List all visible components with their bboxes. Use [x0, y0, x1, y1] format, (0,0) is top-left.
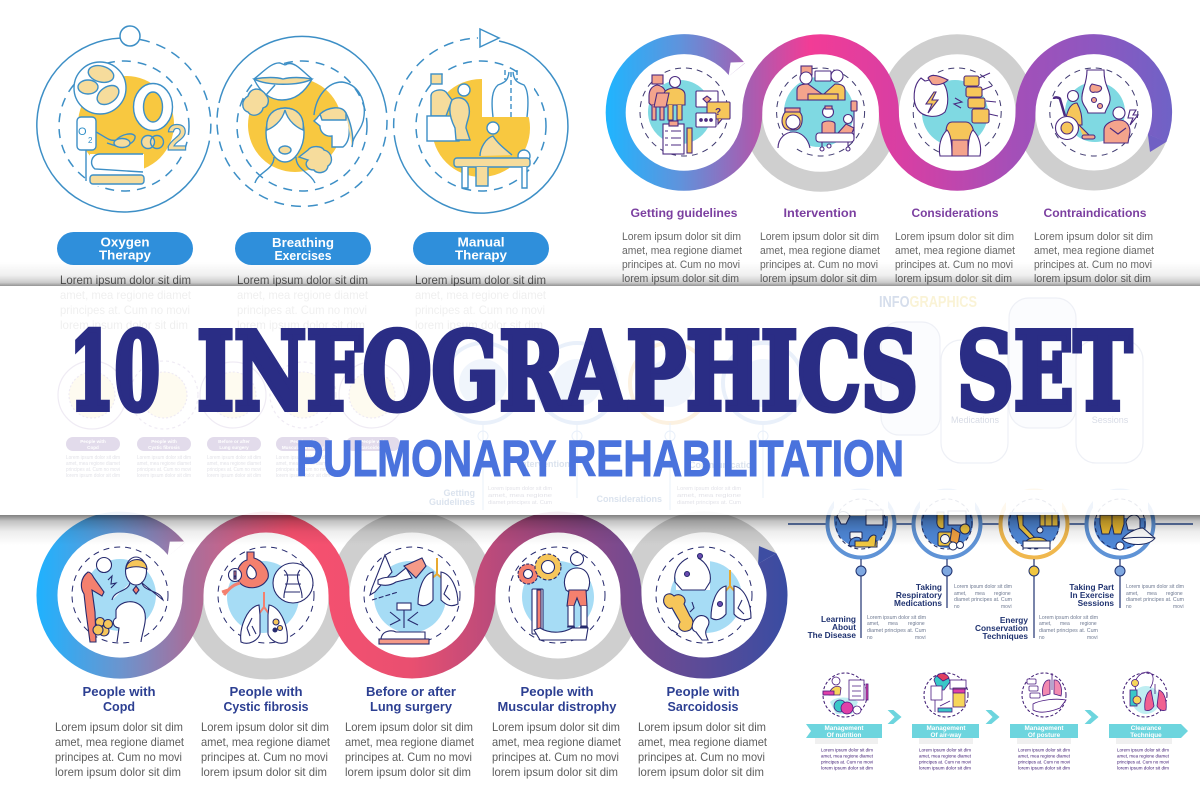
faint timeline [443, 343, 803, 510]
faint lorem rows: principes at. Cum no movi [66, 467, 120, 473]
faint timeline fills [459, 359, 787, 407]
step: taking respiratory medications [894, 490, 1012, 610]
heading: people with sarcoidosis: Sarcoidosis [668, 699, 738, 714]
pill: oxygen therapy [57, 232, 193, 265]
faint card captions: Sessions [1092, 415, 1129, 425]
text block: considerations: amet, mea regione diamet [895, 245, 1015, 257]
faint timeline lorem: diamet principes at. Cum [677, 500, 741, 506]
text block: muscular distrophy: lorem ipsum dolor sit dim [492, 765, 618, 779]
step: clearance technique: Clearance [1131, 725, 1162, 732]
step: learning about the disease: diamet principes at. Cum [867, 628, 926, 634]
text block: considerations: lorem ipsum dolor sit dim [895, 273, 1012, 285]
pill: manual therapy [413, 232, 549, 265]
icon: before or after lung surgery [364, 547, 460, 644]
heading: people with sarcoidosis: People with [666, 684, 740, 699]
icon: oxygen therapy: 2 [88, 136, 93, 145]
panel: therapy circles [37, 26, 568, 332]
ribbon: gradient path [47, 522, 777, 668]
text block: oxygen therapy: Lorem ipsum dolor sit dim [60, 273, 191, 287]
faint pill captions: People with [151, 439, 177, 444]
step: management of nutrition: amet, mea regione diamet [821, 754, 874, 758]
ribbon: gradient path [616, 44, 1162, 181]
text block: lung surgery [345, 720, 475, 779]
faint lorem rows [66, 455, 331, 479]
step: taking part in exercise sessions: Sessions [1078, 598, 1114, 608]
step: energy conservation techniques: Conservation [975, 623, 1028, 633]
step: taking respiratory medications: Respiratory [896, 590, 942, 600]
text block: getting guidelines: principes at. Cum no movi [622, 259, 740, 271]
faint timeline labels: Intervention [518, 459, 570, 469]
step: energy conservation techniques: amet, [1039, 621, 1052, 627]
icon: oxygen therapy: 2 [167, 117, 187, 158]
ribbon: grey arcs [752, 44, 1157, 182]
step: management of air-way [912, 673, 979, 770]
text block: oxygen therapy: amet, mea regione diamet [60, 288, 192, 302]
faint lorem rows: Lorem ipsum dolor sit dim [137, 455, 191, 461]
step: energy conservation techniques: Energy [1000, 615, 1028, 625]
ribbon: grey arcs [193, 522, 767, 669]
icon: people with copd [72, 547, 168, 643]
faint lorem rows: Lorem ipsum dolor sit dim [207, 455, 261, 461]
step: learning about the disease: no [867, 635, 873, 641]
faint timeline labels: Communication [689, 460, 757, 470]
step: management of posture: Lorem ipsum dolor sit dim [1018, 748, 1070, 752]
text block: lung surgery: amet, mea regione diamet [345, 735, 475, 749]
heading: considerations: Considerations [912, 206, 999, 220]
text block: cystic fibrosis [201, 720, 331, 779]
step: management of posture: Management [1024, 725, 1064, 732]
heading: people with copd: People with [82, 684, 156, 699]
text block: cystic fibrosis: principes at. Cum no movi [201, 750, 328, 764]
step: management of posture: lorem ipsum dolor sit dim [1018, 766, 1070, 770]
step: taking respiratory medications: Medications [894, 598, 942, 608]
faint lorem rows: lorem ipsum dolor sit dim [276, 473, 330, 479]
faint lorem rows: Lorem ipsum dolor sit dim [66, 455, 120, 461]
panel: management row [806, 672, 1188, 770]
step: energy conservation techniques: Lorem ipsum dolor sit dim [1039, 615, 1098, 621]
faint lorem rows: principes at. Cum no movi [207, 467, 261, 473]
step: energy conservation techniques: mea [1060, 621, 1070, 627]
text block: contraindications: Lorem ipsum dolor sit dim [1034, 231, 1153, 243]
text block: intervention: principes at. Cum no movi [760, 259, 878, 271]
icon: people with sarcoidosis [656, 547, 752, 643]
step: management of air-way: amet, mea regione diamet [919, 754, 972, 758]
heading: before or after lung surgery: Before or after [366, 684, 456, 699]
faint pill captions: Lung surgery [219, 445, 249, 450]
step: taking part in exercise sessions: diamet principes at. Cum [1126, 597, 1184, 603]
arrow tip [1148, 134, 1167, 152]
step: taking part in exercise sessions: mea [1147, 591, 1157, 597]
step: learning about the disease: amet, [867, 621, 880, 627]
text block: getting guidelines: Lorem ipsum dolor sit dim [622, 231, 741, 243]
faint lorem rows: amet, mea regione diamet [137, 461, 192, 467]
faint pill captions [80, 439, 386, 450]
text block: getting guidelines: lorem ipsum dolor sit dim [622, 273, 739, 285]
text block: breathing exercises: Lorem ipsum dolor sit dim [237, 273, 368, 287]
text block: getting guidelines: amet, mea regione diamet [622, 245, 742, 257]
faint timeline labels: Guidelines [429, 497, 475, 507]
faint pill captions: Cystic fibrosis [148, 445, 180, 450]
step: management of air-way: lorem ipsum dolor sit dim [919, 766, 971, 770]
heading: intervention: Intervention [784, 206, 856, 220]
step: taking respiratory medications: mea [975, 591, 985, 597]
step: energy conservation techniques: no [1039, 635, 1045, 641]
heading: before or after lung surgery: Lung surgery [370, 699, 453, 714]
faint pill captions: Before or after [218, 439, 250, 444]
step: management of nutrition [806, 673, 882, 770]
text block: manual therapy: principes at. Cum no movi [415, 303, 545, 317]
step: learning about the disease: regione [908, 621, 925, 627]
text block: intervention: Lorem ipsum dolor sit dim [760, 231, 879, 243]
text block: intervention: lorem ipsum dolor sit dim [760, 273, 877, 285]
step: energy conservation techniques: movi [1087, 635, 1098, 641]
icon: manual therapy [427, 70, 534, 188]
icon: contraindications [1050, 68, 1138, 156]
text block: intervention: amet, mea regione diamet [760, 245, 880, 257]
heading: before or after lung surgery [366, 684, 456, 714]
text block: sarcoidosis [638, 720, 768, 779]
text block: breathing exercises: lorem ipsum dolor sit dim [237, 318, 365, 332]
faint lorem rows: principes at. Cum no movi [137, 467, 191, 473]
step: clearance technique: Technique [1130, 732, 1162, 739]
heading: people with copd [82, 684, 156, 714]
text block: copd: Lorem ipsum dolor sit dim [55, 720, 183, 734]
step: management of posture: principes at. Cum no movi [1018, 760, 1070, 764]
step: management of air-way: principes at. Cum no movi [919, 760, 971, 764]
text block: sarcoidosis: principes at. Cum no movi [638, 750, 765, 764]
panel: target groups ribbon [47, 522, 777, 779]
heading: people with cystic fibrosis [224, 684, 308, 714]
step: taking part in exercise sessions: movi [1173, 604, 1184, 610]
icon: people with muscular dystrophy [509, 547, 605, 643]
text block: muscular distrophy: amet, mea regione diamet [492, 735, 622, 749]
heading: people with muscular distrophy: Muscular distrophy [498, 699, 617, 714]
step: taking respiratory medications: diamet principes at. Cum [954, 597, 1012, 603]
text block: intervention [760, 231, 880, 285]
faint circles row [58, 361, 405, 429]
ring: oxygen therapy [37, 26, 211, 212]
faint pills [66, 437, 400, 451]
text block: contraindications: principes at. Cum no movi [1034, 259, 1152, 271]
step: management of posture: amet, mea regione diamet [1018, 754, 1071, 758]
text block: sarcoidosis: Lorem ipsum dolor sit dim [638, 720, 766, 734]
step: learning about the disease [808, 490, 926, 641]
step: clearance technique [1109, 672, 1188, 770]
subtitle: PULMONARY REHABILITATION [296, 430, 904, 487]
text block: manual therapy: amet, mea regione diamet [415, 288, 547, 302]
faint pill captions: Sarcoidosis [360, 445, 386, 450]
text block: sarcoidosis: lorem ipsum dolor sit dim [638, 765, 764, 779]
faint timeline lorem: Lorem ipsum dolor sit dim [677, 486, 741, 492]
icon: people with cystic fibrosis [218, 547, 314, 643]
step: clearance technique: Lorem ipsum dolor sit dim [1117, 748, 1169, 752]
step: taking respiratory medications: amet, [954, 591, 967, 597]
arrow notch [728, 62, 746, 76]
text block: lung surgery: lorem ipsum dolor sit dim [345, 765, 471, 779]
icon: getting guidelines: ? [715, 107, 721, 118]
step: taking part in exercise sessions: In Exercise [1070, 590, 1114, 600]
text block: cystic fibrosis: Lorem ipsum dolor sit dim [201, 720, 329, 734]
heading: contraindications: Contraindications [1044, 206, 1147, 220]
shadow above banner [0, 262, 1200, 286]
arrow [1087, 711, 1097, 723]
pill: breathing exercises [235, 232, 371, 265]
heading: people with cystic fibrosis: People with [230, 684, 303, 699]
step: management of nutrition: Management [824, 725, 864, 732]
step: management of posture [1010, 673, 1078, 770]
faint pill captions: Muscular distrophy [282, 445, 325, 450]
step: energy conservation techniques: regione [1080, 621, 1097, 627]
step: energy conservation techniques [975, 490, 1098, 641]
icon: considerations [913, 68, 1001, 156]
faint lorem rows: Lorem ipsum dolor sit dim [276, 455, 330, 461]
faint lorem rows: principes at. Cum no movi [276, 467, 330, 473]
arrow [988, 711, 998, 723]
heading: people with sarcoidosis [666, 684, 740, 714]
faint pill captions: People with [80, 439, 106, 444]
heading: people with muscular distrophy [498, 684, 617, 714]
faint lorem rows: amet, mea regione diamet [276, 461, 331, 467]
faint timeline labels: Getting [444, 488, 475, 498]
step: learning about the disease: Lorem ipsum dolor sit dim [867, 615, 926, 621]
step: clearance technique: lorem ipsum dolor sit dim [1117, 766, 1169, 770]
text block: manual therapy: lorem ipsum dolor sit dim [415, 318, 543, 332]
faint timeline lorem: amet, mea regione [488, 493, 552, 499]
text block: getting guidelines [622, 231, 742, 285]
title: INFOGRAPHICS [197, 310, 918, 435]
text block: muscular distrophy: principes at. Cum no movi [492, 750, 619, 764]
text block: cystic fibrosis: amet, mea regione diamet [201, 735, 331, 749]
panel: timeline [788, 490, 1193, 641]
faint timeline lorem: Lorem ipsum dolor sit dim [488, 486, 552, 492]
step: taking part in exercise sessions: Taking Part [1069, 582, 1114, 592]
step: management of air-way: Of air-way [931, 732, 962, 739]
text block: oxygen therapy: lorem ipsum dolor sit dim [60, 318, 188, 332]
panel: guidelines ribbon [616, 44, 1167, 285]
step: taking part in exercise sessions: amet, [1126, 591, 1139, 597]
text block: manual therapy: Lorem ipsum dolor sit dim [415, 273, 546, 287]
faint background infographics [58, 294, 1143, 510]
step: learning about the disease: movi [915, 635, 926, 641]
text block: copd: principes at. Cum no movi [55, 750, 182, 764]
step: management of posture: Of posture [1028, 732, 1061, 739]
step: taking respiratory medications: movi [1001, 604, 1012, 610]
text block: muscular distrophy: Lorem ipsum dolor sit dim [492, 720, 620, 734]
faint card captions [951, 397, 1129, 425]
pill: oxygen therapy: Therapy [99, 248, 152, 262]
heading: getting guidelines: Getting guidelines [630, 206, 738, 220]
text block: contraindications: amet, mea regione diamet [1034, 245, 1154, 257]
faint timeline labels: Considerations [596, 494, 662, 504]
heading: people with cystic fibrosis: Cystic fibrosis [224, 699, 308, 714]
faint timeline lorem: diamet principes at. Cum [488, 500, 552, 506]
faint pill captions: People with [360, 439, 386, 444]
step: learning about the disease: Learning [821, 614, 856, 624]
faint cards [881, 298, 1143, 463]
faint pill captions: People with [290, 439, 316, 444]
text block: considerations: Lorem ipsum dolor sit dim [895, 231, 1014, 243]
title: 10 [69, 310, 160, 435]
ring: manual therapy [394, 29, 568, 213]
step: taking respiratory medications: Taking [916, 582, 942, 592]
step: energy conservation techniques: Techniques [982, 631, 1028, 641]
text block: contraindications: lorem ipsum dolor sit dim [1034, 273, 1151, 285]
text block: contraindications [1034, 231, 1154, 285]
pill: oxygen therapy: Oxygen [100, 234, 150, 250]
text block: cystic fibrosis: lorem ipsum dolor sit dim [201, 765, 327, 779]
faint timeline lorem [488, 486, 741, 506]
text block: oxygen therapy [60, 273, 192, 332]
icon: oxygen therapy [74, 62, 187, 186]
arrow tip [758, 546, 776, 564]
text block: breathing exercises: amet, mea regione diamet [237, 288, 369, 302]
faint card captions: Medications [951, 415, 1000, 425]
step: taking respiratory medications: no [954, 604, 960, 610]
heading: people with copd: Copd [103, 699, 135, 714]
faint lorem rows: lorem ipsum dolor sit dim [207, 473, 261, 479]
faint timeline lorem: amet, mea regione [677, 493, 741, 499]
faint lorem rows: lorem ipsum dolor sit dim [137, 473, 191, 479]
text block: oxygen therapy: principes at. Cum no movi [60, 303, 190, 317]
banner [0, 286, 1200, 515]
step: taking part in exercise sessions: Lorem ipsum dolor sit dim [1126, 584, 1184, 590]
step: management of nutrition: Lorem ipsum dolor sit dim [821, 748, 873, 752]
icon: oxygen therapy: O [78, 126, 87, 138]
step: management of nutrition: Of nutrition [827, 732, 861, 739]
text block: considerations [895, 231, 1015, 285]
pill: manual therapy: Therapy [455, 248, 508, 262]
text block: muscular distrophy [492, 720, 622, 779]
text block: copd: lorem ipsum dolor sit dim [55, 765, 181, 779]
icon: intervention [777, 66, 865, 156]
text block: copd: amet, mea regione diamet [55, 735, 185, 749]
arrow [890, 711, 900, 723]
pill: breathing exercises: Breathing [272, 235, 334, 250]
step: taking respiratory medications: Lorem ipsum dolor sit dim [954, 584, 1012, 590]
step: clearance technique: amet, mea regione diamet [1117, 754, 1170, 758]
step: learning about the disease: mea [888, 621, 898, 627]
step: management of nutrition: principes at. Cum no movi [821, 760, 873, 764]
faint lorem rows: amet, mea regione diamet [207, 461, 262, 467]
pill: manual therapy: Manual [458, 234, 504, 250]
faint pill captions: Copd [87, 445, 99, 450]
faint heading: INFOGRAPHICS [879, 294, 977, 311]
step: taking part in exercise sessions [1069, 490, 1184, 610]
faint lorem rows: lorem ipsum dolor sit dim [66, 473, 120, 479]
faint timeline labels [429, 459, 757, 507]
step: management of air-way: Lorem ipsum dolor sit dim [919, 748, 971, 752]
text block: breathing exercises [237, 273, 369, 332]
title: SET [957, 310, 1132, 435]
icon: breathing exercises [243, 63, 364, 183]
faint card captions: In [1106, 397, 1114, 407]
pill: breathing exercises: Exercises [274, 248, 332, 263]
shadow below banner [0, 515, 1200, 545]
step: learning about the disease: About [832, 622, 856, 632]
step: taking respiratory medications: regione [994, 591, 1011, 597]
text block: sarcoidosis: amet, mea regione diamet [638, 735, 768, 749]
step: energy conservation techniques: diamet principes at. Cum [1039, 628, 1098, 634]
text block: copd [55, 720, 185, 779]
text block: manual therapy [415, 273, 547, 332]
step: management of air-way: Management [926, 725, 966, 732]
timeline axis [788, 523, 1193, 525]
text block: breathing exercises: principes at. Cum no movi [237, 303, 367, 317]
step: learning about the disease: The Disease [808, 630, 856, 640]
icon: getting guidelines [640, 68, 730, 156]
text block: considerations: principes at. Cum no movi [895, 259, 1013, 271]
text block: lung surgery: Lorem ipsum dolor sit dim [345, 720, 473, 734]
step: management of nutrition: lorem ipsum dolor sit dim [821, 766, 873, 770]
step: clearance technique: principes at. Cum no movi [1117, 760, 1169, 764]
step: taking part in exercise sessions: no [1126, 604, 1132, 610]
arrow notch [168, 542, 186, 557]
faint lorem rows: amet, mea regione diamet [66, 461, 121, 467]
heading: people with muscular distrophy: People with [520, 684, 594, 699]
ring: breathing exercises [217, 36, 387, 206]
step: taking part in exercise sessions: regione [1166, 591, 1183, 597]
text block: lung surgery: principes at. Cum no movi [345, 750, 472, 764]
